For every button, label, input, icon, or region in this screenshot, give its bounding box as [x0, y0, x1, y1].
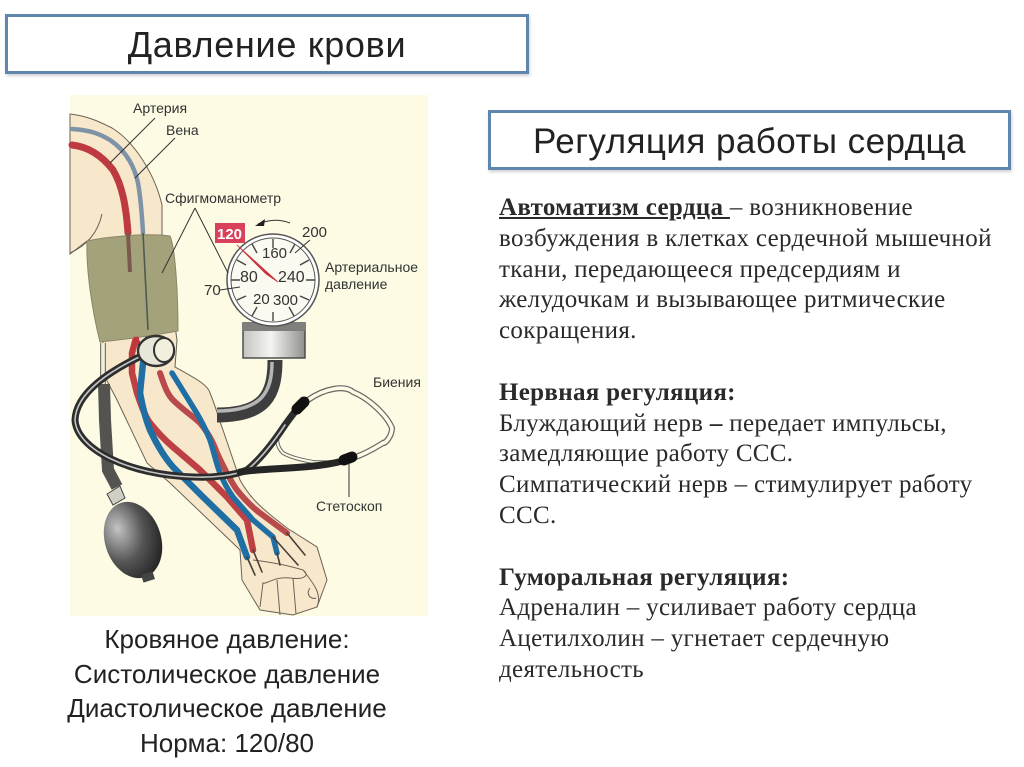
- diagram labels: Биения: [373, 374, 421, 390]
- paragraph: automatism: Автоматизм сердца – возникновение: [499, 194, 913, 221]
- paragraph: nervous regulation: замедляющие работу ССС.: [499, 440, 793, 467]
- diagram labels: Сфигмоманометр: [165, 190, 281, 206]
- text: heart regulation: [498, 194, 992, 683]
- vessels through cuff: [128, 233, 148, 356]
- paragraph: humoral regulation: деятельность: [499, 656, 644, 683]
- illustration background: [70, 95, 428, 616]
- stethoscope tubes: [75, 352, 392, 477]
- caption: blood pressure: Норма: 120/80: [140, 728, 314, 758]
- caption: blood pressure: Систолическое давление: [74, 658, 380, 688]
- gauge dial: 240: [278, 269, 305, 286]
- title: heart regulation: [488, 110, 1011, 170]
- diagram labels: давление: [325, 276, 388, 292]
- rotation arrow: [255, 219, 290, 226]
- diagram labels: 70: [204, 282, 221, 299]
- gauge dial: [227, 234, 319, 326]
- gauge dial: 300: [273, 292, 298, 309]
- paragraph: automatism: возбуждения в клетках сердечной мышечной: [499, 225, 992, 252]
- paragraph: nervous regulation: Симпатический нерв – стимулирует работу: [499, 471, 972, 498]
- diagram labels: Вена: [166, 122, 199, 138]
- bulb: [94, 486, 172, 586]
- paragraph: automatism: желудочкам и вызывающее ритмические: [499, 286, 946, 313]
- blood vessels: [72, 129, 305, 575]
- paragraph: automatism: ткани, передающееся предсердиям и: [499, 256, 901, 283]
- paragraph: humoral regulation: Гуморальная регуляция:: [499, 564, 789, 591]
- diagram labels: [133, 100, 421, 514]
- caption: blood pressure: Кровяное давление:: [104, 624, 350, 654]
- gauge dial: 80: [240, 269, 258, 286]
- paragraph: nervous regulation: [499, 379, 972, 529]
- diagram labels: Артериальное: [325, 259, 418, 275]
- gauge dial: 160: [262, 245, 287, 262]
- cuff: [87, 235, 178, 342]
- cuff tube: [103, 343, 117, 487]
- title: heart regulation: Регуляция работы сердца: [533, 122, 966, 161]
- leader lines: [110, 118, 349, 497]
- paragraph: nervous regulation: Нервная регуляция:: [499, 379, 736, 406]
- gauge reading tag 120: 120: [217, 226, 242, 243]
- diagram labels: 200: [302, 224, 327, 241]
- paragraph: nervous regulation: ССС.: [499, 502, 557, 529]
- title: blood pressure: Давление крови: [128, 24, 406, 65]
- paragraph: nervous regulation: Блуждающий нерв – передает импульсы,: [499, 410, 947, 437]
- caption: blood pressure: Диастолическое давление: [67, 693, 387, 723]
- stethoscope chest piece: [138, 336, 174, 366]
- title: blood pressure: [5, 14, 529, 74]
- caption: blood pressure: [67, 624, 387, 758]
- paragraph: humoral regulation: [499, 564, 917, 683]
- diagram labels: Стетоскоп: [316, 498, 382, 514]
- gauge dial: 20: [253, 291, 270, 308]
- paragraph: humoral regulation: Адреналин – усиливает работу сердца: [499, 594, 917, 621]
- gauge body: [217, 323, 305, 415]
- paragraph: automatism: [498, 194, 992, 344]
- arm: [70, 114, 327, 615]
- diagram labels: Артерия: [133, 100, 187, 116]
- paragraph: automatism: сокращения.: [499, 317, 637, 344]
- paragraph: humoral regulation: Ацетилхолин – угнетает сердечную: [499, 625, 889, 652]
